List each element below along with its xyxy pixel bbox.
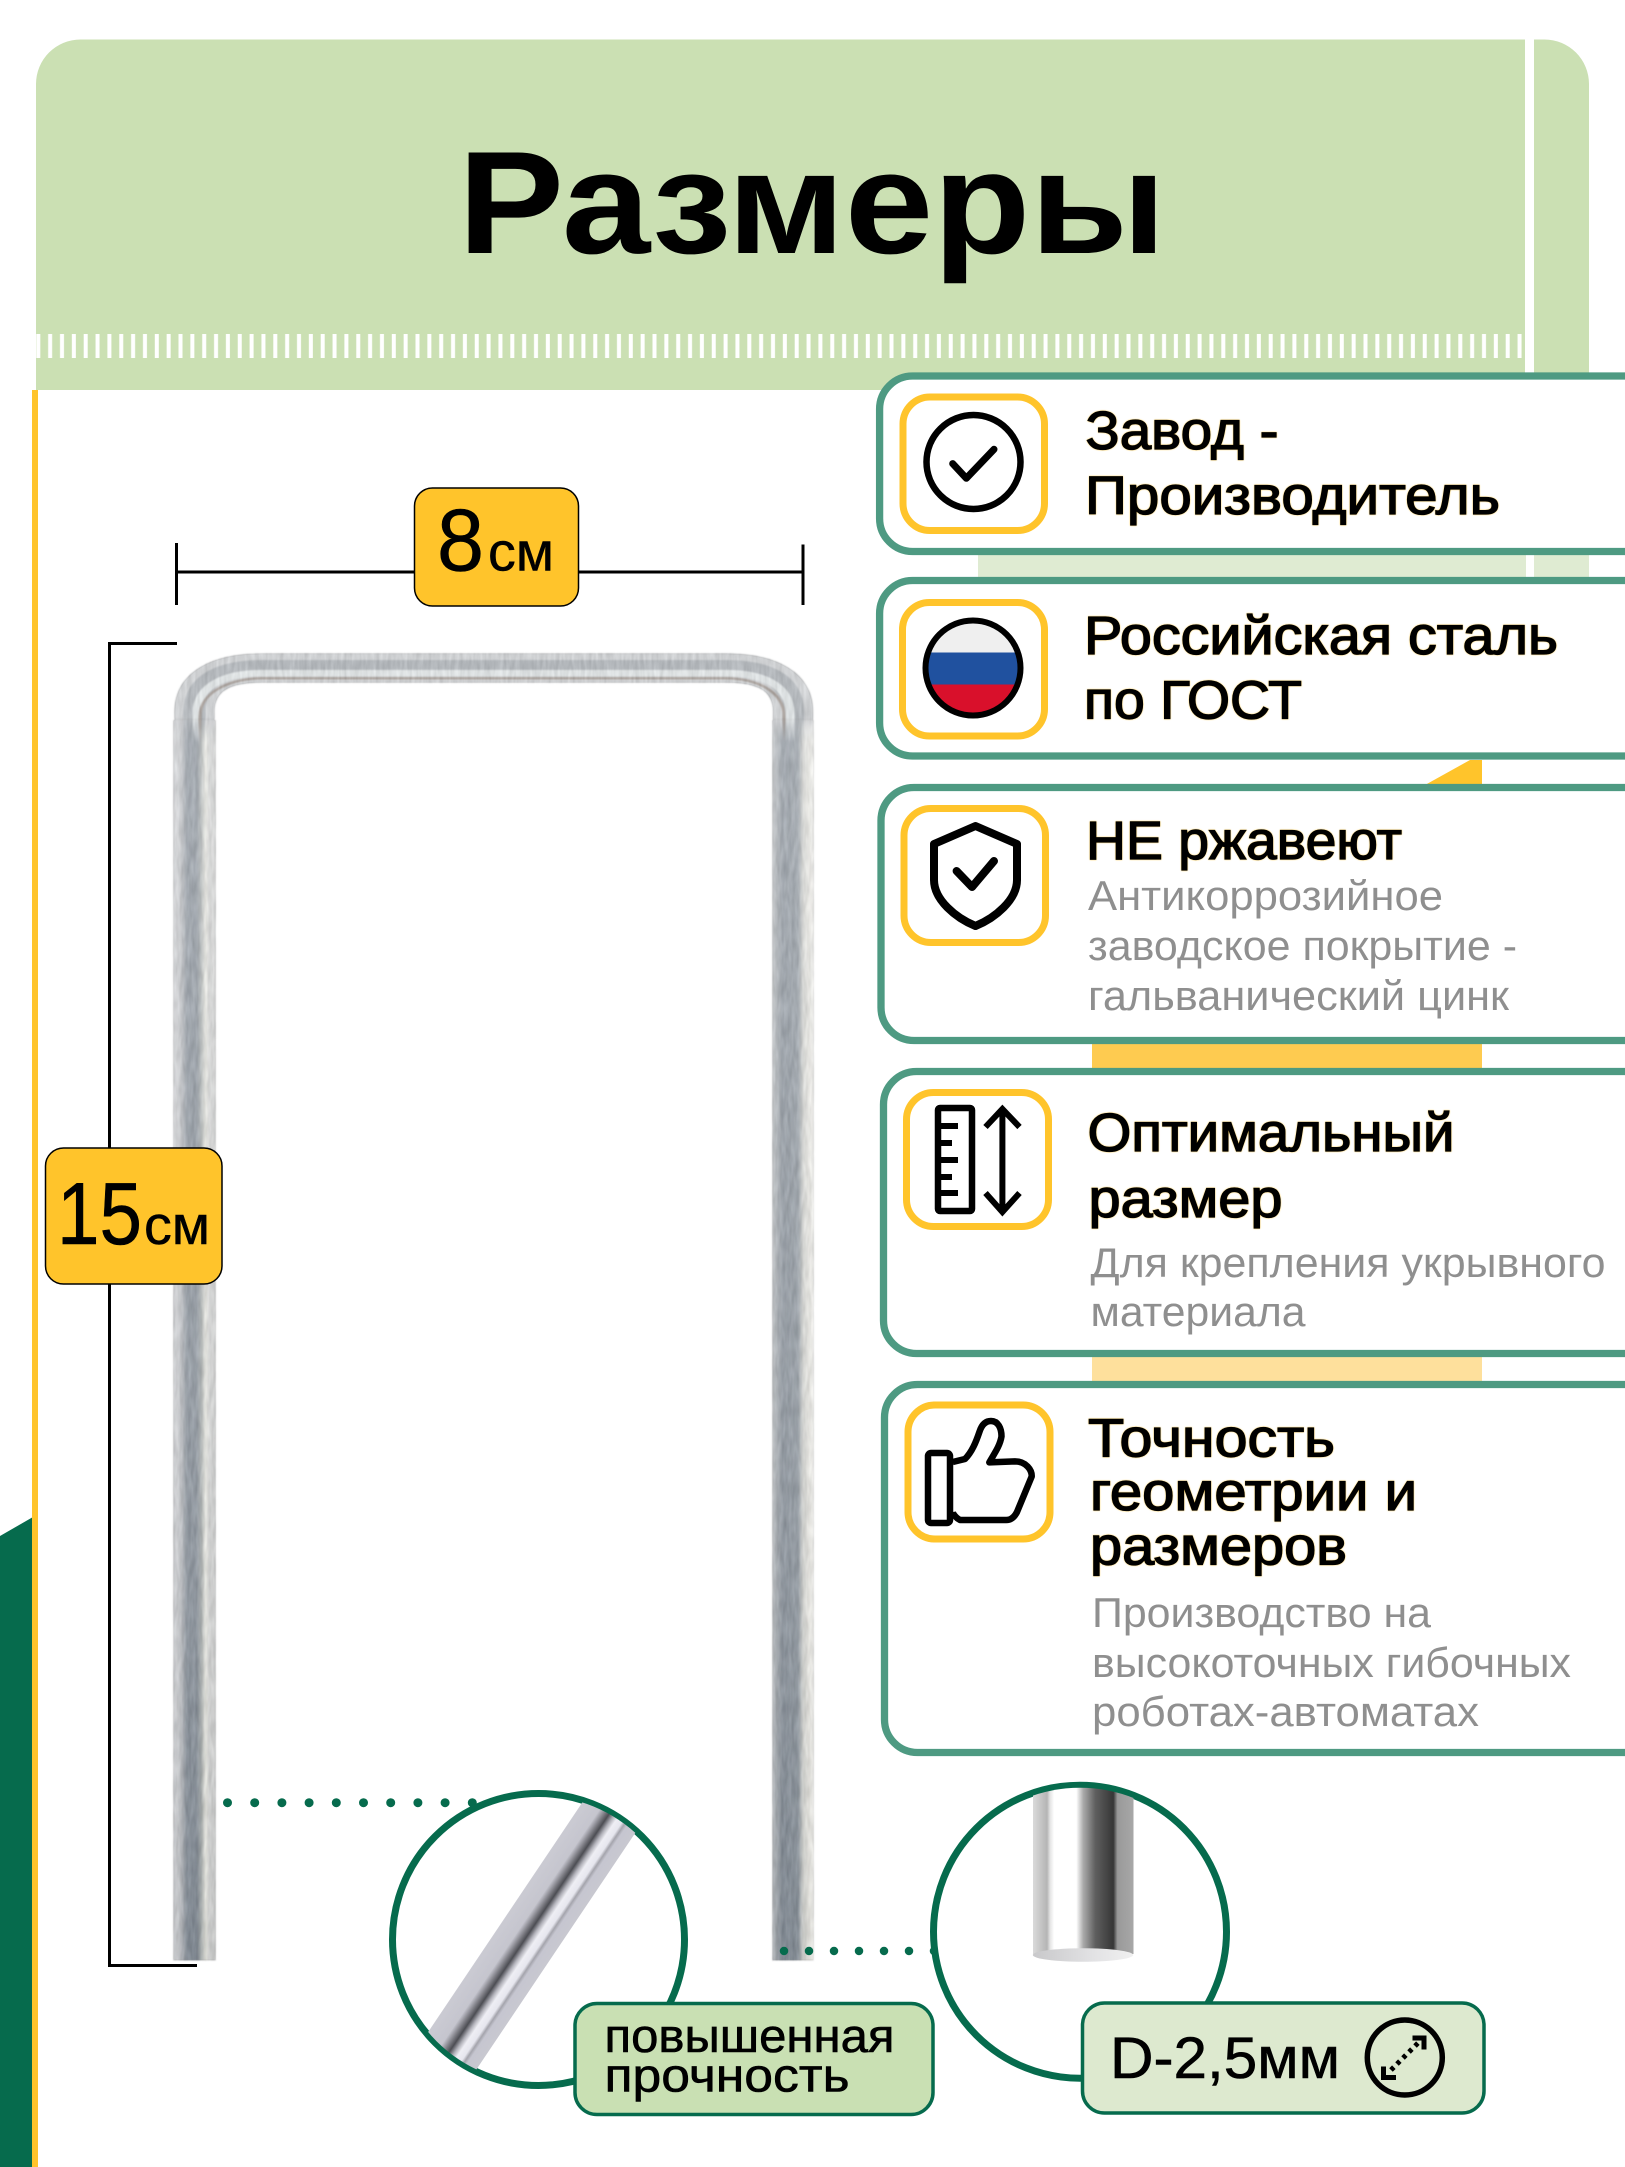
card: precision of geometry	[884, 1384, 1625, 1752]
card heading line 2: геометрии и	[1090, 1462, 1417, 1522]
card heading: Завод -	[1086, 401, 1278, 461]
left green wedge	[0, 1517, 33, 2167]
card heading line 3: размеров	[1090, 1516, 1347, 1576]
staple wire image	[173, 668, 814, 1961]
title: Размеры	[458, 121, 1166, 284]
card description: материала	[1090, 1288, 1306, 1335]
badge: 15 cm: 15	[57, 1164, 142, 1263]
width dimension line	[176, 543, 803, 605]
detail circle: wire strength	[392, 1777, 684, 2093]
height dimension line	[110, 644, 197, 1966]
card heading: Точность	[1088, 1408, 1335, 1468]
card description	[1092, 1589, 1571, 1735]
card: optimal size	[884, 1072, 1625, 1354]
icon: russian flag	[902, 602, 1044, 736]
icon: shield	[904, 808, 1046, 942]
dotted leader to diameter detail	[784, 1947, 935, 1955]
badge: 8 cm: см	[488, 520, 554, 582]
icon: check in circle	[903, 397, 1044, 530]
card heading line 2: по ГОСТ	[1084, 670, 1302, 730]
card description: Для крепления укрывного	[1090, 1239, 1606, 1286]
card description: роботах-автоматах	[1092, 1688, 1479, 1735]
card description	[1088, 872, 1517, 1019]
card description: Антикоррозийное	[1088, 872, 1443, 919]
left yellow line	[32, 390, 38, 2167]
badge: 8 cm: 8	[437, 490, 484, 590]
dotted leader to strength detail	[228, 1798, 473, 1807]
card heading: Российская сталь	[1084, 606, 1558, 666]
card description	[1090, 1239, 1606, 1335]
card heading: Оптимальный	[1088, 1103, 1454, 1163]
card: does not rust	[881, 788, 1625, 1040]
badge: 8 cm	[414, 488, 578, 606]
card description: Производство на	[1092, 1589, 1432, 1636]
detail circle: wire diameter	[934, 1770, 1226, 2078]
label: diameter: D-2,5мм	[1110, 2026, 1340, 2091]
badge: 15 cm	[46, 1148, 222, 1284]
yellow backing strips	[1092, 760, 1482, 1382]
icon: ruler and arrow	[906, 1092, 1048, 1226]
icon: diameter arrows	[1367, 2020, 1442, 2095]
card: factory manufacturer	[880, 376, 1625, 552]
label: increased strength	[575, 2004, 933, 2114]
card description: гальванический цинк	[1088, 972, 1510, 1019]
label: diameter	[1082, 2003, 1484, 2113]
label: increased strength: прочность	[604, 2048, 850, 2102]
card: russian steel	[880, 580, 1625, 756]
card description: высокоточных гибочных	[1092, 1639, 1571, 1686]
icon: thumbs up	[908, 1405, 1050, 1539]
label: increased strength: повышенная	[604, 2009, 894, 2062]
card heading: НЕ ржавеют	[1086, 811, 1402, 871]
card description: заводское покрытие -	[1088, 922, 1517, 969]
header banner	[36, 39, 1589, 579]
card heading line 2: размер	[1088, 1169, 1282, 1229]
card heading line 2: Производитель	[1085, 466, 1500, 526]
badge: 15 cm: см	[144, 1194, 210, 1256]
